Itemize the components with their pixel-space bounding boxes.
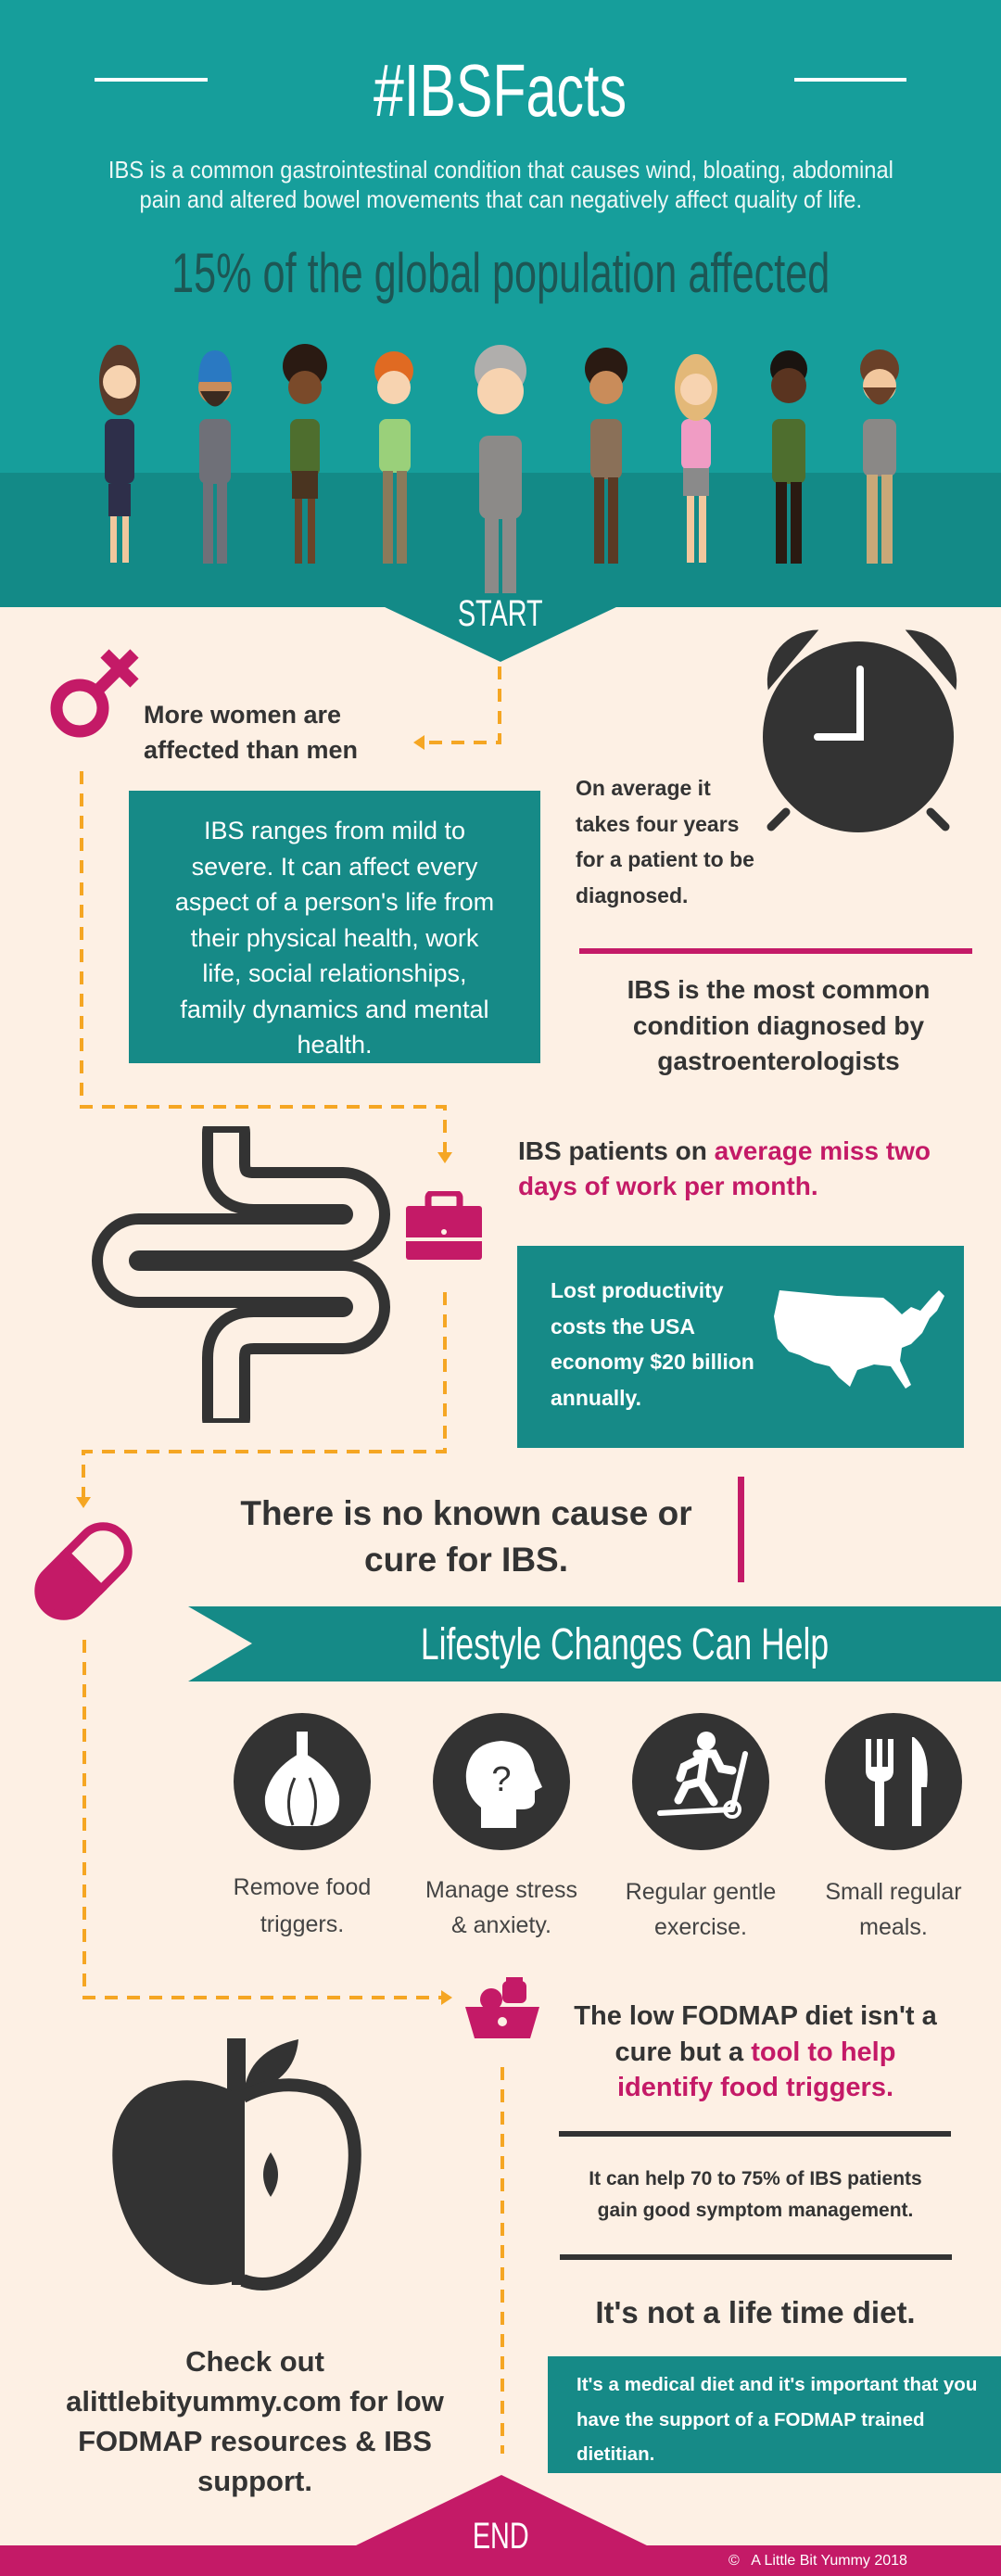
- teal box: severity: IBS ranges from mild to: [204, 817, 465, 844]
- label: regular exercise: [626, 1879, 776, 1940]
- text: four years: [576, 776, 754, 907]
- icon: female symbol: [50, 649, 139, 738]
- title: #IBSFacts: [374, 49, 627, 132]
- text: 70 to 75%: gain good symptom management.: [598, 2200, 913, 2221]
- text: four years: for a patient to be: [576, 847, 754, 871]
- text: more women: More women are: [144, 701, 341, 729]
- end chevron: [356, 2475, 647, 2545]
- person 8: [770, 350, 807, 564]
- dark rule 1: [559, 2131, 951, 2137]
- teal box: medical diet: It's a medical diet and it's important that you: [577, 2374, 977, 2395]
- icon: USA map: [774, 1290, 944, 1389]
- teal box: severity: severe. It can affect every: [192, 853, 477, 881]
- text: check out website: Check out: [185, 2345, 324, 2378]
- icon: fork and knife: [825, 1713, 962, 1850]
- text: most common condition: condition diagnosed by: [633, 1010, 924, 1040]
- text: check out website: FODMAP resources & IBS: [78, 2425, 432, 2457]
- text: check out website: alittlebityummy.com for low: [66, 2385, 444, 2417]
- teal box: severity: health.: [297, 1031, 373, 1059]
- text: more women: [144, 701, 358, 764]
- start label: START: [458, 593, 543, 634]
- label: manage stress: & anxiety.: [451, 1912, 551, 1938]
- person 1: [99, 345, 140, 563]
- label: small meals: [825, 1879, 962, 1940]
- icon: head with question: [433, 1713, 570, 1850]
- text: productivity cost: annually.: [551, 1385, 641, 1409]
- label: small meals: Small regular: [825, 1879, 962, 1905]
- title rule left: [95, 78, 208, 82]
- teal box: medical diet: dietitian.: [577, 2443, 654, 2465]
- text: most common condition: gastroenterologists: [657, 1047, 900, 1075]
- icon: head with question: ?: [491, 1760, 512, 1799]
- teal box: medical diet: have the support of a FODMAP trained: [577, 2408, 925, 2430]
- person 3: [283, 344, 327, 564]
- footer bar: [0, 2545, 1001, 2576]
- text: four years: diagnosed.: [576, 882, 688, 907]
- intro text: IBS is a common gastrointestinal condition that causes wind, bloating, abdominal: [108, 156, 893, 184]
- text: miss two days: IBS patients on average miss two: [518, 1136, 931, 1165]
- text: more women: affected than men: [144, 736, 358, 764]
- text: no known cause: There is no known cause or: [240, 1494, 692, 1532]
- text: not a lifetime diet: It's not a life time diet.: [595, 2295, 916, 2329]
- teal box: severity: aspect of a person's life from: [175, 888, 494, 916]
- end label: END: [473, 2516, 528, 2557]
- header background: [0, 0, 1001, 607]
- banner: lifestyle changes: Lifestyle Changes Can Help: [421, 1619, 829, 1669]
- start chevron: [385, 607, 616, 662]
- text: productivity cost: [551, 1278, 754, 1410]
- text: check out website: [66, 2345, 444, 2497]
- text: 70 to 75%: [589, 2168, 922, 2221]
- text: most common condition: [627, 975, 930, 1075]
- label: regular exercise: exercise.: [654, 1914, 747, 1940]
- label: remove food triggers: Remove food: [234, 1874, 371, 1900]
- icon: garlic: [234, 1713, 371, 1850]
- teal box: medical diet: [548, 2356, 1001, 2473]
- text: low FODMAP tool: The low FODMAP diet isn't a: [574, 2001, 937, 2031]
- teal box: severity: [129, 791, 540, 1063]
- label: regular exercise: Regular gentle: [626, 1879, 776, 1905]
- text: low FODMAP tool: [574, 2001, 937, 2102]
- teal box: severity: their physical health, work: [191, 923, 478, 951]
- label: small meals: meals.: [859, 1914, 928, 1940]
- text: miss two days: days of work per month.: [518, 1172, 818, 1200]
- text: productivity cost: Lost productivity: [551, 1278, 724, 1302]
- teal box: lost productivity: [517, 1246, 964, 1448]
- label: remove food triggers: [234, 1874, 371, 1937]
- text: no known cause: cure for IBS.: [364, 1541, 568, 1579]
- title rule right: [794, 78, 906, 82]
- dark rule 2: [560, 2254, 952, 2260]
- text: check out website: support.: [197, 2465, 312, 2497]
- icon: pill: [34, 1522, 133, 1620]
- label: remove food triggers: triggers.: [260, 1911, 344, 1937]
- text: most common condition: IBS is the most common: [627, 975, 930, 1004]
- text: low FODMAP tool: cure but a tool to help: [615, 2037, 895, 2067]
- people illustration: [99, 344, 899, 593]
- person 6: [585, 348, 627, 564]
- person 9: [860, 349, 899, 564]
- teal box: severity: family dynamics and mental: [180, 996, 489, 1023]
- person 5: [475, 345, 526, 624]
- copyright: © A Little Bit Yummy 2018: [729, 2553, 907, 2569]
- banner: lifestyle changes: [188, 1606, 1001, 1681]
- pink vertical rule: [738, 1477, 744, 1582]
- label: manage stress: Manage stress: [425, 1877, 577, 1903]
- text: no known cause: [240, 1494, 692, 1579]
- intro text: pain and altered bowel movements that can negatively affect quality of life.: [139, 185, 862, 213]
- icon: treadmill exercise: [632, 1713, 769, 1850]
- text: four years: takes four years: [576, 812, 739, 836]
- intro text: [108, 156, 893, 213]
- pink rule: [579, 948, 972, 954]
- text: miss two days: [518, 1136, 931, 1200]
- text: low FODMAP tool: identify food triggers.: [617, 2073, 893, 2102]
- text: productivity cost: costs the USA: [551, 1314, 695, 1339]
- person 4: [374, 351, 413, 564]
- icon: basket: [465, 1977, 539, 2038]
- text: productivity cost: economy $20 billion: [551, 1350, 754, 1374]
- text: four years: On average it: [576, 776, 711, 800]
- headline stat: 15% of the global population affected: [171, 242, 830, 304]
- icon: apple: [112, 2038, 361, 2290]
- icon: briefcase: [406, 1191, 482, 1260]
- icon: alarm clock: [763, 630, 957, 832]
- icon: intestine: [92, 1126, 390, 1423]
- text: 70 to 75%: It can help 70 to 75% of IBS patients: [589, 2168, 922, 2189]
- person 7: [675, 354, 717, 563]
- teal box: severity: life, social relationships,: [202, 959, 467, 987]
- label: manage stress: [425, 1877, 577, 1938]
- person 2: [198, 350, 232, 564]
